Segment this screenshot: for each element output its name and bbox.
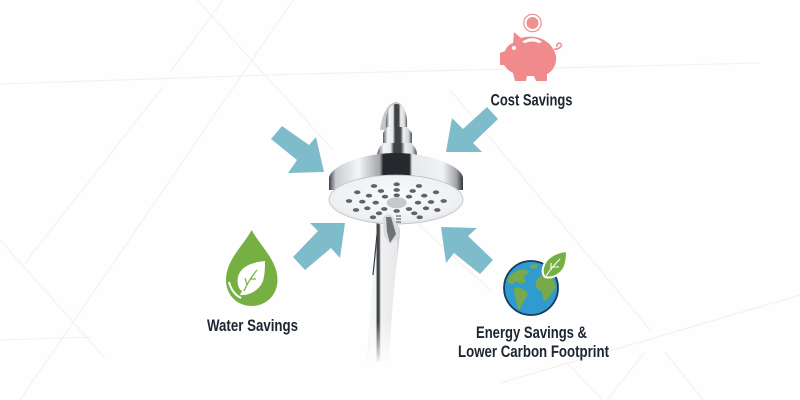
sprayer face bbox=[329, 175, 463, 224]
leaf bbox=[543, 251, 567, 277]
continents bbox=[508, 264, 556, 309]
label: cost savings: Cost Savings bbox=[490, 92, 572, 110]
arrow: bottom left bbox=[293, 223, 345, 270]
centre button bbox=[387, 197, 407, 208]
label: energy savings and lower carbon footprint: Energy Savings & bbox=[476, 324, 587, 342]
globe bbox=[504, 261, 558, 315]
icon: globe with leaf bbox=[504, 251, 567, 315]
arm below the head bbox=[360, 223, 400, 364]
eye bbox=[512, 46, 516, 50]
leaf bbox=[238, 261, 265, 295]
neck bbox=[377, 102, 417, 155]
highlight bbox=[229, 282, 241, 298]
pig body bbox=[500, 32, 556, 81]
leaf vein bbox=[546, 259, 560, 276]
tail bbox=[554, 43, 561, 49]
arrow: top right bbox=[446, 107, 498, 152]
nozzles bbox=[346, 182, 447, 219]
label: energy savings and lower carbon footprint bbox=[458, 324, 609, 361]
label: energy savings and lower carbon footprint: Lower Carbon Footprint bbox=[458, 343, 609, 361]
leaf veins bbox=[244, 270, 257, 291]
arrow: bottom right bbox=[441, 227, 493, 274]
icon: water drop with leaf bbox=[226, 230, 278, 306]
coin bbox=[524, 14, 541, 32]
chrome band bbox=[329, 153, 463, 190]
icon: piggy bank bbox=[500, 14, 561, 81]
arrow: top left bbox=[271, 126, 324, 173]
slot bbox=[522, 38, 542, 43]
label: water savings: Water Savings bbox=[207, 317, 298, 335]
drop bbox=[226, 230, 278, 306]
shower head bbox=[329, 102, 463, 364]
arrows bbox=[271, 107, 498, 274]
swivel joint bbox=[383, 214, 401, 244]
